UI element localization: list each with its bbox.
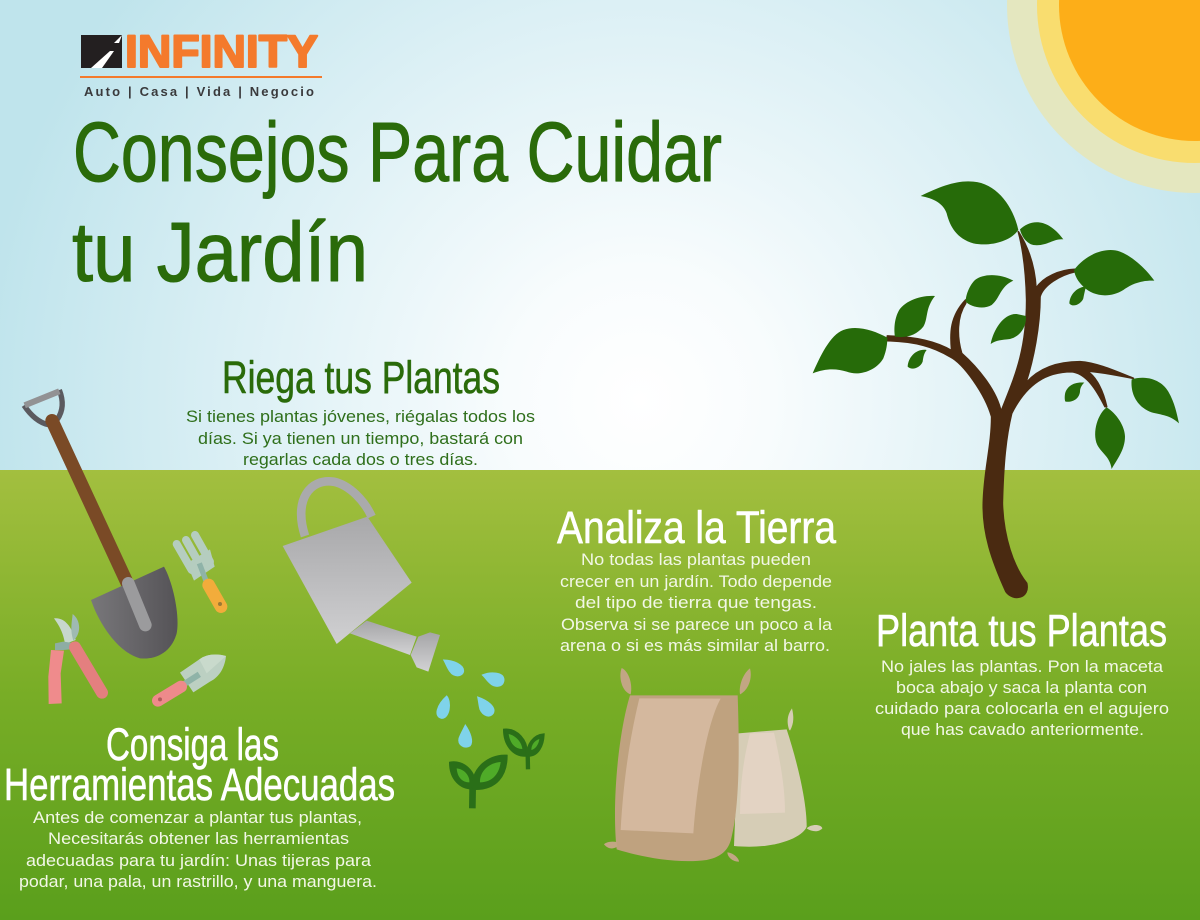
heading: consiga: Herramientas Adecuadas [4, 759, 395, 810]
section: analiza la tierra [557, 502, 837, 655]
section: planta tus plantas [875, 605, 1169, 739]
text: consiga: Necesitarás obtener las herramientas [48, 829, 349, 848]
icon: shovel [24, 390, 178, 659]
text: planta: que has cavado anteriormente. [901, 720, 1144, 739]
section: riega tus plantas [186, 352, 535, 469]
sprouts [450, 730, 544, 808]
logo: Infinity [80, 26, 322, 99]
soil bags [604, 668, 822, 862]
icon: sun [1007, 0, 1200, 193]
title [72, 105, 722, 299]
logo: Infinity: INFINITY [125, 26, 318, 77]
text: riega: regarlas cada dos o tres días. [243, 450, 478, 469]
text: analiza: No todas las plantas pueden [581, 550, 811, 569]
icon: large bag [604, 668, 751, 862]
icon: sprout small [504, 730, 544, 769]
text: analiza: Observa si se parece un poco a la [561, 615, 833, 634]
grass ground [0, 470, 1200, 920]
icon: hand rake [177, 535, 222, 607]
sky background [0, 0, 1200, 470]
title: tu Jardín [72, 205, 368, 299]
text: riega: días. Si ya tienen un tiempo, bastará con [198, 429, 523, 448]
text: riega: Si tienes plantas jóvenes, riégalas todos los [186, 407, 535, 426]
icon: small bag [734, 708, 822, 847]
title: Consejos Para Cuidar [73, 105, 722, 199]
text: analiza: arena o si es más similar al barro. [560, 636, 830, 655]
heading: riega: Riega tus Plantas [222, 352, 500, 403]
icon: water drops [437, 660, 504, 747]
tree trunk and branches [887, 232, 1133, 597]
heading: analiza: Analiza la Tierra [557, 502, 837, 553]
icon: sprout large [450, 756, 507, 808]
heading: consiga [4, 719, 395, 810]
text: consiga: adecuadas para tu jardín: Unas tijeras para [26, 851, 372, 870]
text: planta: No jales las plantas. Pon la maceta [881, 657, 1164, 676]
section: consiga las herramientas [4, 719, 395, 891]
logo: Infinity: Auto | Casa | Vida | Negocio [84, 84, 314, 99]
icon: trowel [158, 654, 226, 701]
text: planta: boca abajo y saca la planta con [896, 678, 1147, 697]
text: consiga: podar, una pala, un rastrillo, y una manguera. [19, 872, 377, 891]
tree leaves [813, 181, 1179, 469]
text: analiza [560, 550, 833, 655]
garden tools [24, 390, 226, 704]
text: analiza: crecer en un jardín. Todo depende [560, 572, 832, 591]
icon: pruning shears [48, 614, 102, 704]
watering scene [283, 481, 504, 747]
text: planta: cuidado para colocarla en el agujero [875, 699, 1169, 718]
icon: watering can [283, 481, 440, 672]
text: planta [875, 657, 1169, 739]
icon: tree [813, 181, 1179, 597]
heading: consiga: Consiga las [106, 719, 279, 770]
text: riega [186, 407, 535, 469]
text: consiga [19, 808, 377, 891]
text: consiga: Antes de comenzar a plantar tus plantas, [33, 808, 362, 827]
text: analiza: del tipo de tierra que tengas. [575, 593, 817, 612]
